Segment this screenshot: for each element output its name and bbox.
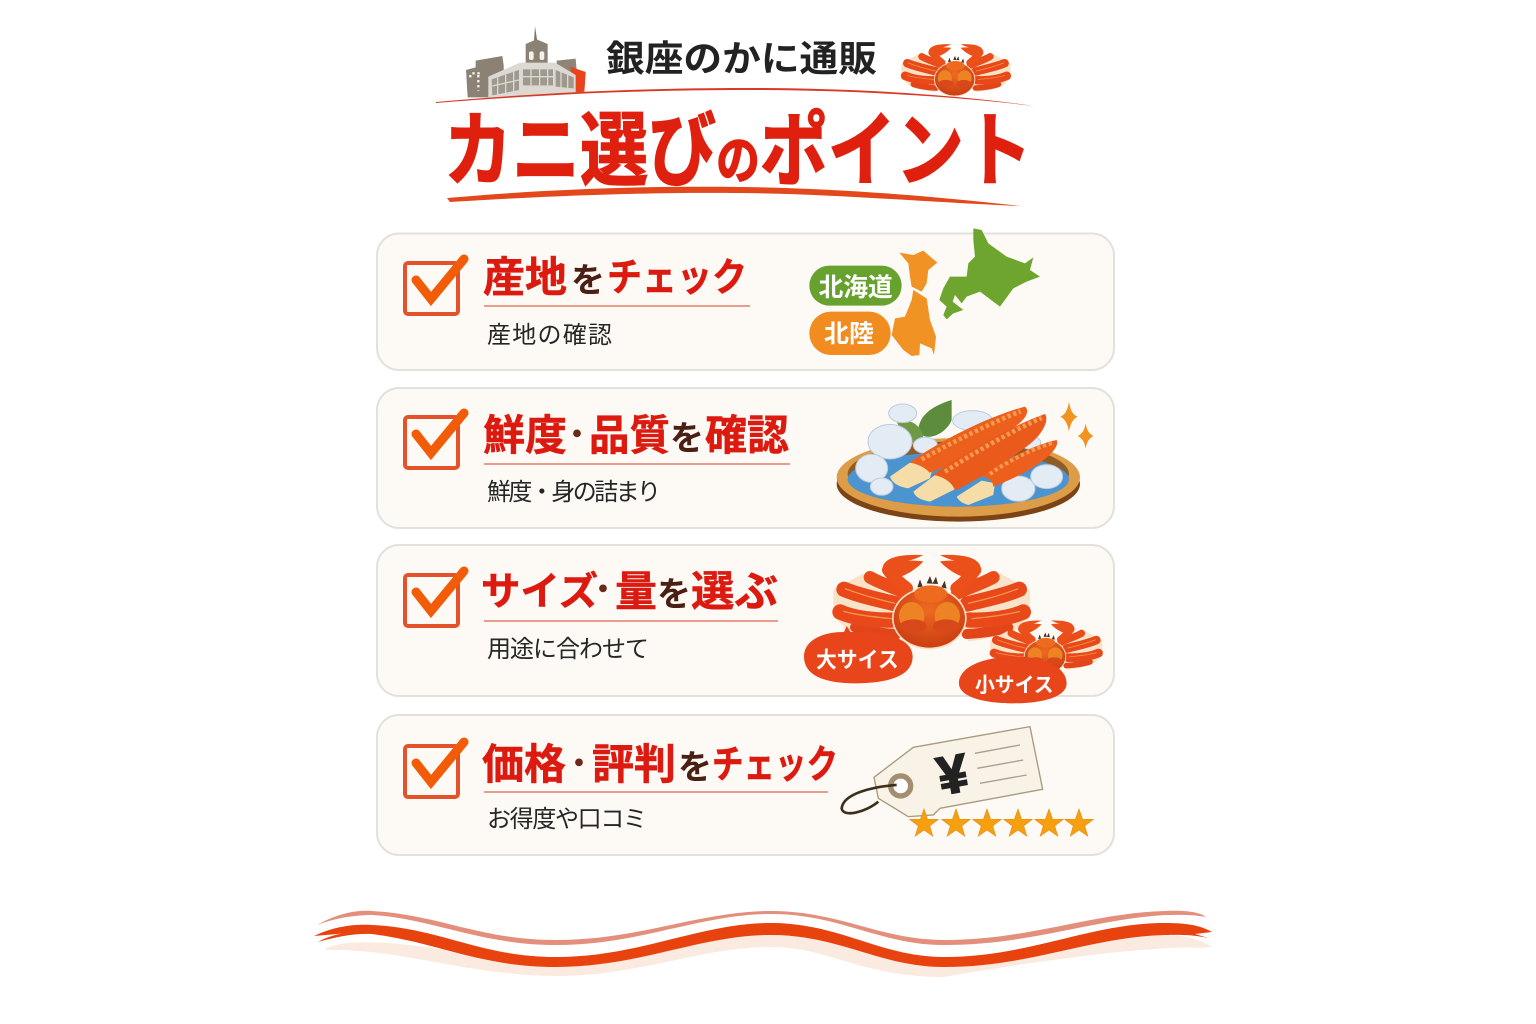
brand name: 銀座のかに通販 — [606, 38, 877, 79]
icon: checkbox — [405, 571, 464, 626]
icon: crabs with size labels — [804, 555, 1102, 703]
header: brand row — [466, 26, 1010, 99]
label: small: 小サイス — [975, 674, 1054, 697]
heading: size — [481, 568, 778, 615]
heading: price: を — [678, 749, 712, 787]
decorative wave — [314, 911, 1212, 977]
icon: checkbox — [405, 742, 464, 797]
icon: header crab — [901, 44, 1010, 97]
heading: price: 評判 — [592, 741, 676, 788]
icon: price tag — [842, 727, 1043, 817]
label: Hokuriku — [809, 312, 891, 355]
heading: origin: を — [571, 262, 605, 300]
label: large: 大サイス — [816, 647, 899, 672]
label: large — [804, 626, 913, 683]
heading: freshness: 品質 — [589, 412, 670, 459]
heading: freshness: 確認 — [705, 412, 789, 459]
icon: Ginza building — [466, 26, 586, 99]
heading: origin: 産地 — [483, 254, 567, 301]
heading: freshness: ・ — [562, 419, 592, 452]
subtext: price: お得度や口コミ — [487, 806, 647, 833]
title text: カニ選びのポイント — [444, 107, 1032, 197]
heading: size: ・ — [588, 574, 618, 607]
heading: price: ・ — [564, 748, 594, 781]
icon: star rating — [910, 809, 1093, 836]
panel: origin — [377, 228, 1114, 370]
heading: size: を — [657, 576, 691, 614]
heading: price: 価格 — [482, 741, 566, 788]
panel: freshness — [377, 388, 1114, 528]
icon: large crab — [833, 555, 1030, 649]
label: Hokkaido: 北海道 — [819, 274, 893, 302]
heading: size: 量 — [615, 568, 657, 615]
subtext: size: 用途に合わせて — [487, 636, 649, 663]
icon: crab legs on plate — [837, 400, 1094, 522]
title — [436, 88, 1034, 206]
heading: freshness: 鮮度 — [483, 412, 567, 459]
icon: checkbox — [405, 259, 464, 314]
panel: price — [377, 715, 1114, 855]
subtext: origin: 産地の確認 — [487, 322, 612, 349]
icon: sparkles — [1060, 402, 1094, 449]
heading: size: サイズ — [481, 571, 598, 614]
heading: size: 選ぶ — [691, 568, 778, 615]
icon: Japan map — [809, 228, 1040, 356]
icon: checkbox — [405, 413, 464, 468]
heading: price: チェック — [712, 744, 838, 787]
heading: origin: チェック — [607, 257, 747, 300]
label: small — [959, 657, 1067, 703]
label: Hokkaido — [809, 266, 902, 306]
panel: size — [377, 545, 1114, 703]
title bottom swoosh — [447, 187, 1021, 206]
heading: price — [482, 741, 838, 788]
icon: price tag: ¥ — [933, 743, 973, 807]
title top rule — [436, 88, 1034, 106]
heading: freshness — [483, 412, 789, 459]
heading: origin — [483, 254, 747, 301]
subtext: freshness: 鮮度・身の詰まり — [487, 479, 661, 506]
icon: small crab — [990, 620, 1102, 674]
label: Hokuriku: 北陸 — [824, 320, 874, 348]
heading: freshness: を — [670, 420, 704, 458]
